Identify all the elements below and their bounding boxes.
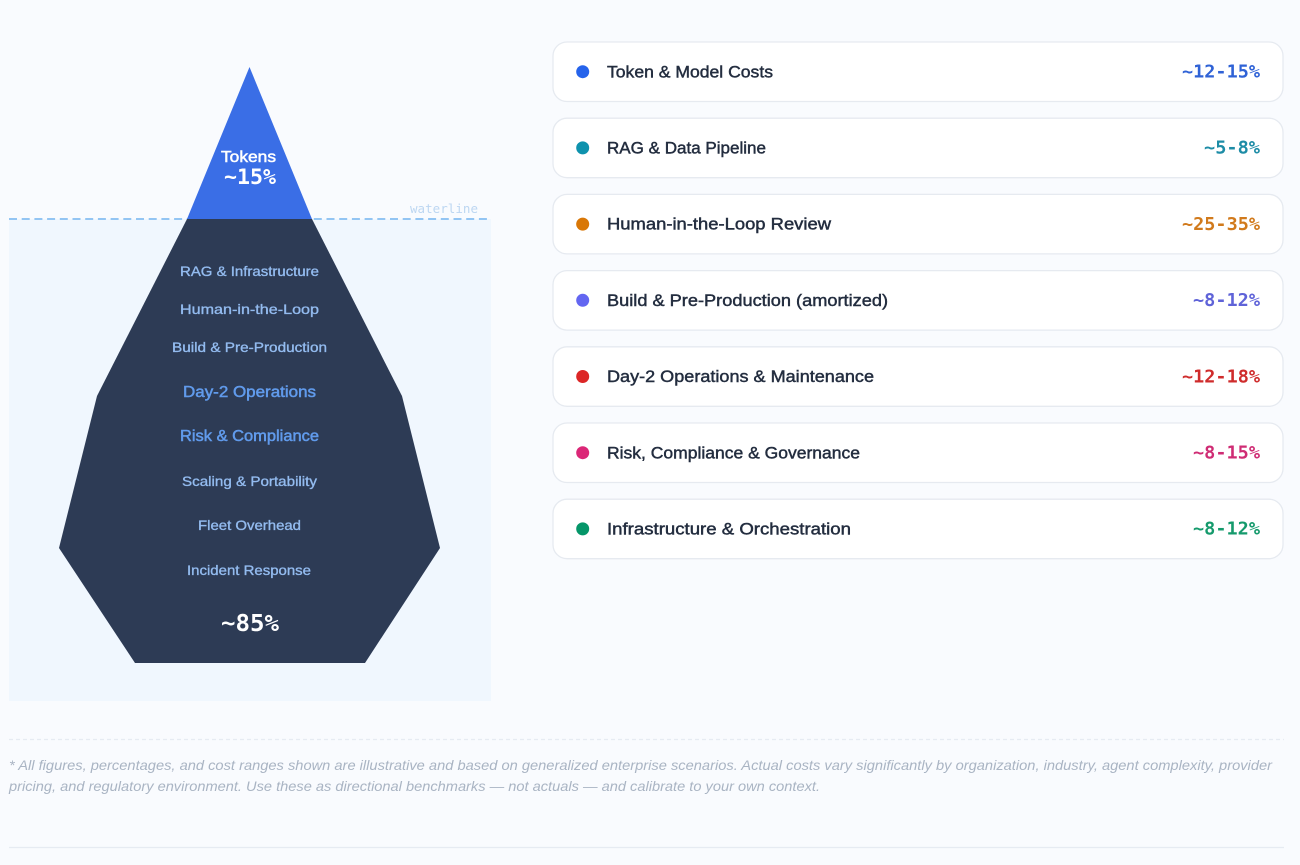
card: human-in-the-loop review: ~25-35% bbox=[1182, 215, 1260, 235]
card: day-2 operations and maintenance: Day-2 Operations & Maintenance bbox=[607, 368, 874, 386]
card: day-2 operations and maintenance: ~12-18% bbox=[1182, 367, 1260, 387]
footnote disclaimer: * All figures, percentages, and cost ranges shown are illustrative and based on generalized enterprise scenarios. Actual costs vary significantly by organization, industry, agent complexity, provider bbox=[9, 757, 1273, 773]
card: risk, compliance and governance bbox=[553, 423, 1283, 482]
submerged percentage: ~85% bbox=[221, 609, 279, 637]
card: token and model costs: ~12-15% bbox=[1182, 62, 1260, 82]
panel: cost breakdown list bbox=[553, 42, 1283, 559]
hidden cost: RAG and infrastructure: RAG & Infrastructure bbox=[180, 263, 319, 279]
iceberg tip: tokens bbox=[187, 67, 312, 219]
hidden cost: scaling and portability: Scaling & Portability bbox=[182, 473, 317, 489]
card: RAG and data pipeline: RAG & Data Pipeline bbox=[607, 140, 766, 158]
hidden cost: build and pre-production: Build & Pre-Production bbox=[172, 339, 327, 355]
card: human-in-the-loop review: Human-in-the-Loop Review bbox=[607, 216, 831, 234]
iceberg submerged body bbox=[59, 219, 440, 663]
card: infrastructure and orchestration: Infrastructure & Orchestration bbox=[607, 520, 851, 538]
card: RAG and data pipeline bbox=[553, 118, 1283, 178]
card: build and pre-production: Build & Pre-Production (amortized) bbox=[607, 292, 888, 310]
waterline dashed marker bbox=[9, 218, 491, 220]
hidden cost: risk and compliance: Risk & Compliance bbox=[180, 428, 319, 445]
waterline label: waterline bbox=[410, 201, 478, 216]
hidden cost: human in the loop: Human-in-the-Loop bbox=[180, 301, 319, 317]
card: day-2 operations and maintenance bbox=[553, 347, 1283, 406]
hidden cost: incident response: Incident Response bbox=[187, 562, 311, 578]
tip label: Tokens bbox=[221, 149, 276, 166]
water background bbox=[9, 219, 491, 701]
card: human-in-the-loop review bbox=[553, 194, 1283, 254]
card: build and pre-production: ~8-12% bbox=[1193, 291, 1260, 311]
footnote disclaimer: pricing, and regulatory environment. Use these as directional benchmarks — not actuals — and calibrate to your own context. bbox=[8, 778, 820, 794]
card: RAG and data pipeline: ~5-8% bbox=[1204, 139, 1260, 159]
card: infrastructure and orchestration bbox=[553, 499, 1283, 559]
hidden cost: day-2 operations: Day-2 Operations bbox=[183, 384, 316, 401]
card: build and pre-production bbox=[553, 271, 1283, 330]
card: risk, compliance and governance: ~8-15% bbox=[1193, 444, 1260, 464]
footnote disclaimer bbox=[8, 757, 1273, 794]
card: infrastructure and orchestration: ~8-12% bbox=[1193, 520, 1260, 540]
panel: iceberg diagram bbox=[9, 67, 491, 701]
hidden cost: fleet overhead: Fleet Overhead bbox=[198, 517, 301, 533]
card: risk, compliance and governance: Risk, Compliance & Governance bbox=[607, 444, 860, 462]
tip percentage: ~15% bbox=[224, 165, 276, 189]
card: token and model costs: Token & Model Costs bbox=[607, 63, 773, 81]
card: token and model costs bbox=[553, 42, 1283, 102]
